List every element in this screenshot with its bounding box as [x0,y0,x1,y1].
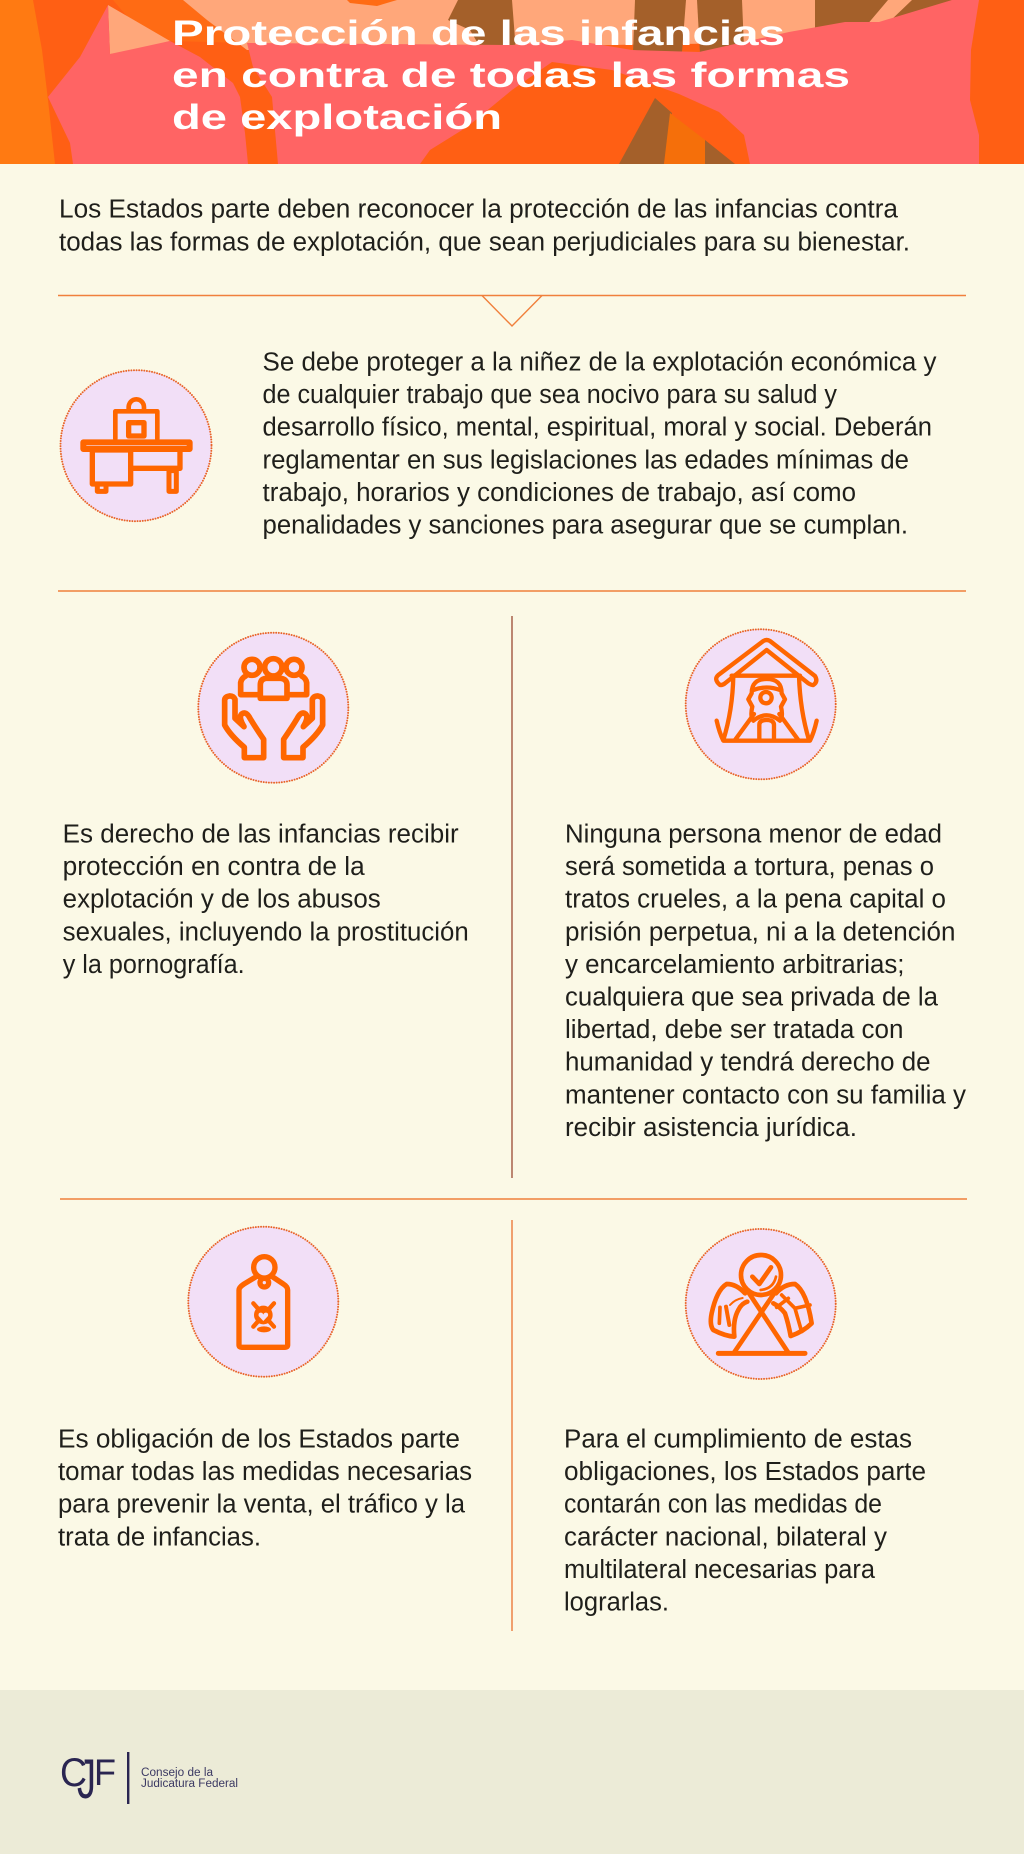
text: economic exploitation: reglamentar en sus legislaciones las edades mínimas de [262,446,909,474]
title: Protección de las infancias [172,14,785,53]
footer band [0,1690,1024,1854]
text: national and multilateral measures: carácter nacional, bilateral y [564,1523,887,1551]
intro text [59,196,910,256]
logo: Consejo de la Judicatura Federal: F [94,1752,116,1793]
text: sale and trafficking: tomar todas las medidas necesarias [58,1458,472,1486]
logo: Consejo de la Judicatura Federal: Consejo de la [141,1767,214,1779]
text: torture and detention: será sometida a tortura, penas o [565,853,934,881]
text: economic exploitation: de cualquier trabajo que sea nocivo para su salud y [262,381,837,409]
text: torture and detention: mantener contacto con su familia y [565,1081,966,1109]
icon: child under shelter [686,629,836,779]
text: economic exploitation: desarrollo físico, mental, espiritual, moral y social. Deberán [262,414,932,442]
text: sale and trafficking: trata de infancias. [58,1523,261,1551]
header collage banner [0,0,1024,164]
text: torture and detention: prisión perpetua, ni a la detención [565,918,956,946]
text: national and multilateral measures [564,1426,926,1616]
text: economic exploitation [262,348,937,540]
text: torture and detention: recibir asistencia jurídica. [565,1114,857,1142]
title: en contra de todas las formas [172,56,850,95]
text: torture and detention: humanidad y tendrá derecho de [565,1049,930,1077]
title [172,14,850,137]
text: sexual abuse protection: y la pornografía. [63,951,245,979]
text: national and multilateral measures: Para el cumplimiento de estas [564,1426,912,1454]
text: national and multilateral measures: multilateral necesarias para [564,1556,876,1584]
logo: Consejo de la Judicatura Federal: Judicatura Federal [141,1778,238,1790]
text: torture and detention: libertad, debe ser tratada con [565,1016,904,1044]
icon: desk [60,370,212,521]
text: sexual abuse protection [63,820,469,979]
text: economic exploitation: penalidades y sanciones para asegurar que se cumplan. [262,512,908,540]
text: national and multilateral measures: contarán con las medidas de [564,1491,882,1519]
text: economic exploitation: Se debe proteger a la niñez de la explotación económica y [262,348,937,376]
text: sale and trafficking [58,1426,472,1551]
intro text: Los Estados parte deben reconocer la protección de las infancias contra [59,196,899,224]
text: sexual abuse protection: explotación y de los abusos [63,886,381,914]
icon: check mark with wings [686,1229,836,1379]
text: sale and trafficking: para prevenir la venta, el tráfico y la [58,1491,466,1519]
text: torture and detention: Ninguna persona menor de edad [565,820,942,848]
logo: Consejo de la Judicatura Federal: J [77,1747,96,1810]
logo: Consejo de la Judicatura Federal: C [60,1751,87,1795]
text: torture and detention: tratos crueles, a la pena capital o [565,886,946,914]
text: sexual abuse protection: protección en contra de la [63,853,366,881]
text: torture and detention: y encarcelamiento arbitrarias; [565,951,904,979]
text: sexual abuse protection: Es derecho de las infancias recibir [63,820,459,848]
text: torture and detention [565,820,966,1142]
text: sexual abuse protection: sexuales, incluyendo la prostitución [63,918,469,946]
logo: Consejo de la Judicatura Federal [60,1747,238,1810]
icon: price tag with skull [188,1227,338,1377]
text: national and multilateral measures: lograrlas. [564,1588,669,1616]
text: national and multilateral measures: obligaciones, los Estados parte [564,1458,926,1486]
text: torture and detention: cualquiera que sea privada de la [565,984,939,1012]
title: de explotación [172,98,502,137]
text: sale and trafficking: Es obligación de los Estados parte [58,1426,460,1454]
icon: hands protecting people [198,633,348,783]
text: economic exploitation: trabajo, horarios y condiciones de trabajo, así como [262,479,856,507]
intro text: todas las formas de explotación, que sean perjudiciales para su bienestar. [59,228,910,256]
